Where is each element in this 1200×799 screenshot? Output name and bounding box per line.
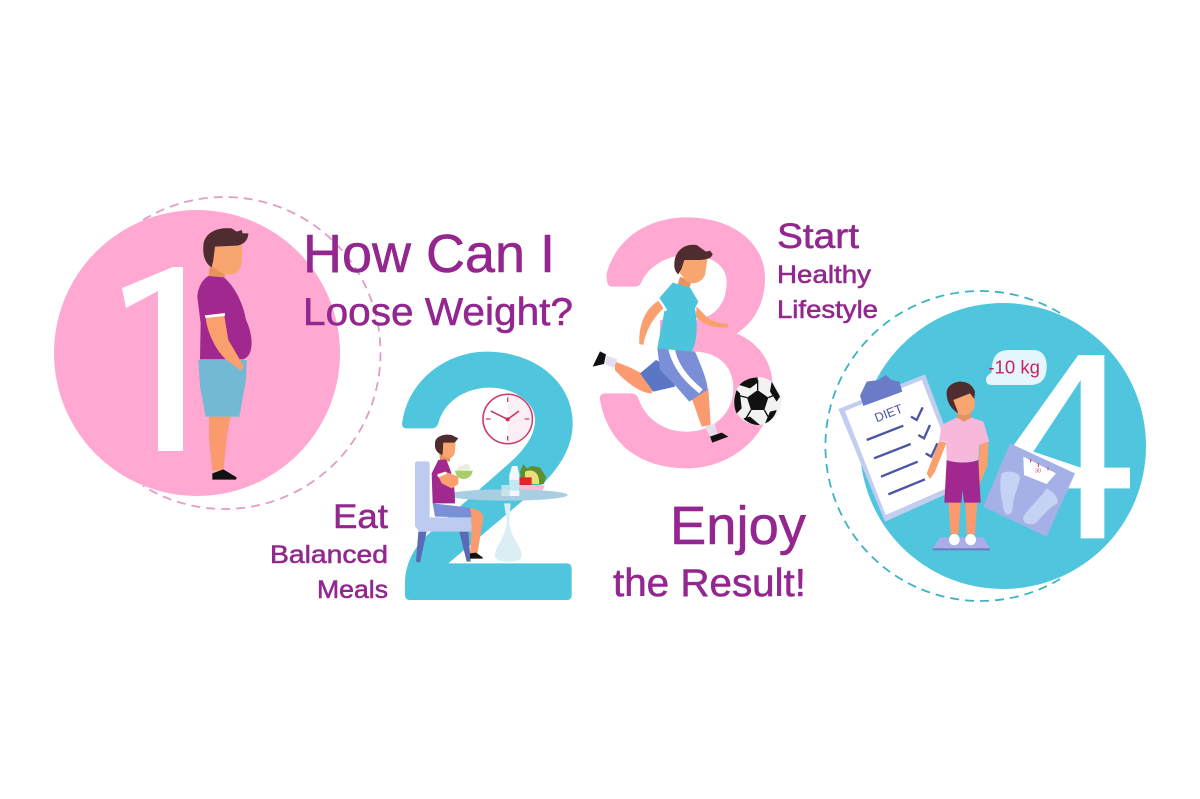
panel: step 2 (402, 352, 573, 600)
icon: diet clipboard (838, 374, 967, 522)
panel: step 1 (54, 197, 381, 509)
icon: soccer ball (734, 377, 782, 425)
text: Eat Balanced Meals (270, 498, 389, 604)
text: Start Healthy Lifestyle: Lifestyle (777, 296, 878, 324)
figure: overweight boy in profile (197, 228, 252, 480)
panel: step 4 (825, 291, 1146, 601)
numeral 1 (122, 267, 183, 451)
text: Eat Balanced Meals: Balanced (270, 541, 388, 569)
heading: Enjoy: Enjoy (670, 496, 806, 556)
heading: Loose Weight?: Loose Weight? (303, 291, 573, 334)
text: Start Healthy Lifestyle: Healthy (777, 261, 872, 289)
figure: boy eating at table (432, 435, 483, 559)
table with food and bottle (447, 464, 568, 562)
figure: slim boy on scale (927, 382, 990, 550)
icon: wall clock (483, 394, 532, 444)
text: Start Healthy Lifestyle (777, 217, 878, 324)
figure: boy kicking a ball (593, 245, 728, 443)
icon: bathroom scale: 30 (1035, 468, 1041, 474)
icon: diet clipboard: DIET (873, 402, 905, 425)
panel: step 3 (593, 217, 782, 468)
icon: bathroom scale (983, 443, 1075, 537)
heading: the Result!: the Result! (613, 562, 806, 605)
callout: -10 kg: -10 kg (988, 357, 1040, 378)
text: Start Healthy Lifestyle: Start (777, 217, 859, 256)
text: Eat Balanced Meals: Eat (333, 498, 389, 536)
numeral 2 (402, 352, 573, 600)
numeral 4 (1007, 355, 1130, 538)
text: Eat Balanced Meals: Meals (317, 576, 388, 604)
chair (415, 461, 474, 563)
heading: How Can I: How Can I (303, 224, 555, 284)
numeral 3 (600, 217, 773, 468)
callout: -10 kg (986, 350, 1047, 385)
